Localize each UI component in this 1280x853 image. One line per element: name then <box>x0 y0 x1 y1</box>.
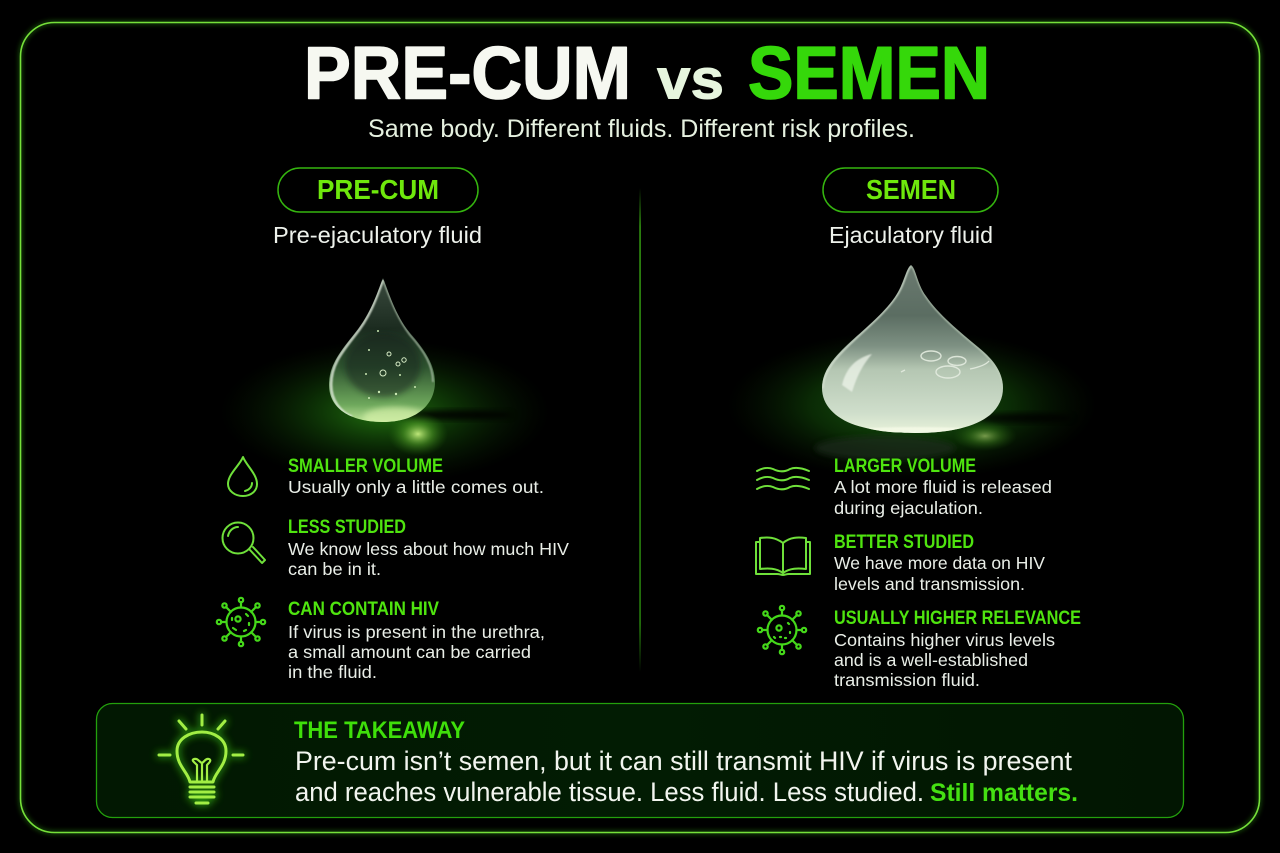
heading: the takeaway: THE TAKEAWAY <box>294 717 465 744</box>
title: vs <box>657 48 724 112</box>
item: better studied <box>756 531 1045 594</box>
panel: pre-cum <box>217 168 569 682</box>
illustration: cloudy drop <box>752 265 1072 470</box>
icon: drop <box>228 457 257 496</box>
item: smaller volume <box>228 455 544 497</box>
item: less studied: We know less about how much HIV <box>288 539 569 559</box>
pill: pre-cum: PRE-CUM <box>317 174 439 205</box>
item: can contain hiv: a small amount can be carried <box>288 642 531 662</box>
illustration: clear drop <box>246 278 524 472</box>
item: less studied <box>222 516 569 579</box>
callout: the takeaway <box>96 704 1184 818</box>
item: usually higher relevance: USUALLY HIGHER RELEVANCE <box>834 607 1081 629</box>
takeaway text <box>295 746 1078 807</box>
icon: open book <box>756 538 810 575</box>
icon: magnifier <box>222 522 265 563</box>
item: smaller volume: Usually only a little comes out. <box>288 477 544 497</box>
item: better studied: We have more data on HIV <box>834 553 1045 573</box>
icon: virus <box>217 598 265 646</box>
item: larger volume: A lot more fluid is released <box>834 477 1052 497</box>
pill: semen <box>823 168 998 212</box>
item: less studied: can be in it. <box>288 559 381 579</box>
item: usually higher relevance: Contains higher virus levels <box>834 630 1055 650</box>
icon: light bulb <box>159 715 243 803</box>
item: can contain hiv: in the fluid. <box>288 662 377 682</box>
item: usually higher relevance: and is a well-established <box>834 650 1028 670</box>
takeaway text: and reaches vulnerable tissue. Less fluid. Less studied. <box>295 777 924 807</box>
center divider <box>639 188 641 672</box>
item: can contain hiv: CAN CONTAIN HIV <box>288 598 439 620</box>
takeaway text: Still matters. <box>930 779 1078 807</box>
title: PRE-CUM <box>304 32 631 114</box>
icon: waves <box>757 468 809 489</box>
label: pre-ejaculatory fluid: Pre-ejaculatory fluid <box>273 222 482 248</box>
item: larger volume <box>757 455 1052 518</box>
title: SEMEN <box>748 32 990 114</box>
icon: virus <box>758 606 806 654</box>
item: can contain hiv <box>217 598 545 682</box>
takeaway text: Pre-cum isn’t semen, but it can still transmit HIV if virus is present <box>295 746 1072 776</box>
item: better studied: levels and transmission. <box>834 574 1025 594</box>
subtitle: Same body. Different fluids. Different risk profiles. <box>368 115 915 143</box>
item: larger volume: during ejaculation. <box>834 498 983 518</box>
item: smaller volume: SMALLER VOLUME <box>288 455 443 477</box>
item: usually higher relevance: transmission fluid. <box>834 670 980 690</box>
label: ejaculatory fluid: Ejaculatory fluid <box>829 222 993 248</box>
item: usually higher relevance <box>758 606 1081 690</box>
pill: pre-cum <box>278 168 478 212</box>
panel: semen <box>752 167 1080 686</box>
item: better studied: BETTER STUDIED <box>834 531 974 553</box>
item: less studied: LESS STUDIED <box>288 516 406 538</box>
title <box>304 32 990 114</box>
item: larger volume: LARGER VOLUME <box>834 455 976 477</box>
item: can contain hiv: If virus is present in the urethra, <box>288 622 545 642</box>
pill: semen: SEMEN <box>866 174 956 205</box>
